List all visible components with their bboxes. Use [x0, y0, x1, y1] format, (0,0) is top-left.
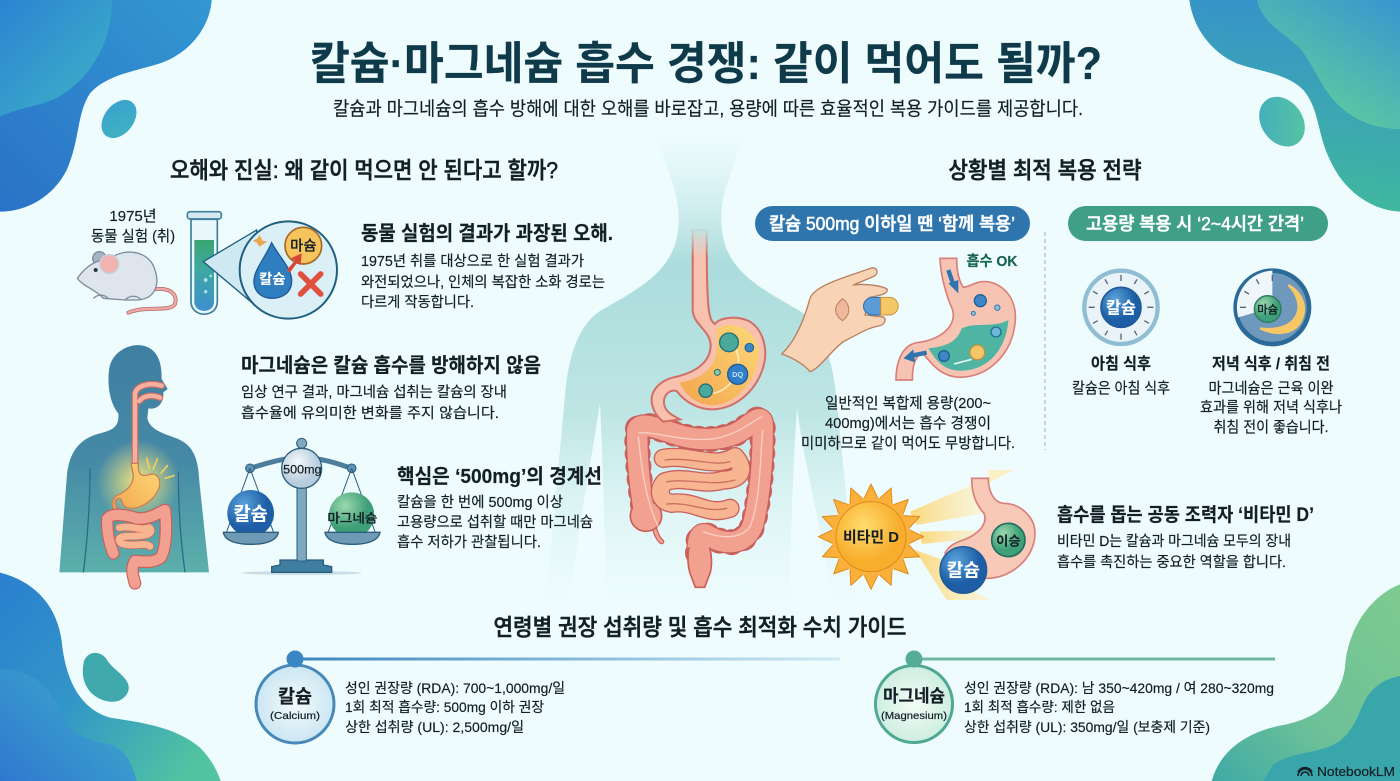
pill heading: together [755, 206, 1030, 241]
pill heading: spaced [1068, 206, 1328, 241]
icon: evening clock with moon [1236, 271, 1309, 344]
illustration: vitamin D sun and stomach [818, 470, 1035, 600]
text block: myth of animal study [361, 222, 613, 311]
guide: magnesium: 성인 권장량 (RDA): 남 350~420mg / 여 280~320mg [964, 680, 1274, 696]
text block: typical dose: 400mg)에서는 흡수 경쟁이 [825, 415, 991, 432]
label: absorption OK: 흡수 OK [966, 253, 1018, 270]
text block: morning: 아침 식후 [1091, 355, 1151, 373]
text block: typical dose [801, 395, 1015, 452]
guide: magnesium [876, 650, 1275, 742]
illustration: vitamin D sun and stomach: 칼슘 [947, 561, 980, 581]
guide: calcium: 성인 권장량 (RDA): 700~1,000mg/일 [345, 680, 565, 696]
text block: morning [1072, 355, 1170, 397]
text block: 500mg boundary: 흡수 저하가 관찰됩니다. [397, 534, 541, 551]
pill heading: together: 칼슘 500mg 이하일 땐 ‘함께 복용’ [769, 214, 1015, 234]
label: 1975 animal study: 1975년 [109, 208, 157, 225]
icon: evening clock with moon: 마슘 [1257, 304, 1278, 317]
corner blob: bottom right [1212, 584, 1400, 781]
label: 1975 animal study: 동물 실험 (취) [91, 228, 175, 245]
icon: balance scale with 500mg [223, 438, 380, 575]
central digestive illustration: DQ [732, 370, 743, 379]
text block: magnesium does not interfere: 마그네슘은 칼슘 흡수를 방해하지 않음 [241, 354, 541, 377]
icon: morning clock [1084, 271, 1158, 344]
test tube [187, 212, 221, 314]
icon: rat, test tube and lens [77, 212, 337, 319]
text block: typical dose: 일반적인 복합제 용량(200~ [825, 395, 991, 412]
guide: calcium: 상한 섭취량 (UL): 2,500mg/일 [345, 719, 524, 735]
lens: 칼슘 [259, 271, 286, 288]
guide: magnesium: 1회 최적 흡수량: 제한 없음 [964, 699, 1115, 715]
icon: human body with digestive tract [59, 345, 209, 583]
small intestine [660, 457, 741, 511]
guide: calcium: 칼슘 [278, 686, 312, 707]
text block: magnesium does not interfere [241, 354, 541, 422]
text block: myth of animal study: 동물 실험의 결과가 과장된 오해. [361, 222, 613, 245]
central body silhouette [545, 130, 858, 610]
text block: magnesium does not interfere: 흡수율에 유의미한 변화를 주지 않습니다. [241, 405, 499, 422]
corner blob: top left [0, 0, 212, 212]
text block: 500mg boundary [397, 465, 602, 551]
illustration: hand with capsule [782, 268, 898, 372]
text block: evening: 저녁 식후 / 취침 전 [1212, 355, 1330, 373]
guide: calcium: 1회 최적 흡수량: 500mg 이하 권장 [345, 699, 544, 715]
icon: balance scale with 500mg: 500mg [283, 463, 321, 476]
text block: myth of animal study: 다르게 작동합니다. [361, 294, 474, 311]
text block: typical dose: 미미하므로 같이 먹어도 무방합니다. [801, 435, 1015, 452]
guide: magnesium: 마그네슘 [883, 686, 945, 706]
text block: vitamin D [1057, 504, 1314, 571]
colon [630, 417, 763, 587]
section heading: left: 오해와 진실: 왜 같이 먹으면 안 된다고 할까? [170, 157, 558, 183]
lens: 마슘 [290, 238, 317, 255]
guide: calcium [256, 650, 840, 743]
subtitle: 칼슘과 마그네슘의 흡수 방해에 대한 오해를 바로잡고, 용량에 따른 효율적인 복용 가이드를 제공합니다. [333, 98, 1083, 120]
guide: magnesium: 상한 섭취량 (UL): 350mg/일 (보충제 기준) [964, 719, 1210, 735]
text block: evening [1200, 355, 1342, 436]
text block: evening: 마그네슘은 근육 이완 [1208, 380, 1334, 397]
text block: 500mg boundary: 핵심은 ‘500mg’의 경계선 [397, 465, 602, 488]
icon: morning clock: 칼슘 [1106, 299, 1136, 318]
text block: morning: 칼슘은 아침 식후 [1072, 380, 1170, 397]
corner blob: top right [1189, 0, 1400, 212]
illustration: vitamin D sun and stomach: 이승 [996, 533, 1021, 548]
section heading: bottom guide: 연령별 권장 섭취량 및 흡수 최적화 수치 가이드 [494, 614, 906, 640]
logo: NotebookLM: NotebookLM [1317, 764, 1395, 779]
guide: calcium: (Calcium) [270, 710, 320, 722]
text block: 500mg boundary: 고용량으로 섭취할 때만 마그네슘 [397, 514, 593, 531]
text block: myth of animal study: 와전되었으나, 인체의 복잡한 소화 경로는 [361, 274, 605, 291]
label: 1975 animal study [91, 208, 175, 245]
illustration: stomach absorption OK [896, 258, 1015, 380]
text block: vitamin D: 비타민 D는 칼슘과 마그네슘 모두의 장내 [1057, 533, 1291, 550]
title: 칼슘·마그네슘 흡수 경쟁: 같이 먹어도 될까? [310, 38, 1102, 89]
text block: evening: 효과를 위해 저녁 식후나 [1200, 399, 1342, 416]
text block: evening: 취침 전이 좋습니다. [1214, 419, 1328, 436]
icon: balance scale with 500mg: 마그네슘 [327, 511, 377, 525]
corner blob: bottom left [0, 573, 221, 781]
icon: balance scale with 500mg: 칼슘 [234, 503, 268, 524]
central digestive illustration [630, 229, 765, 587]
text block: vitamin D: 흡수를 촉진하는 중요한 역할을 합니다. [1057, 554, 1286, 571]
guide: magnesium: (Magnesium) [881, 710, 947, 722]
text block: magnesium does not interfere: 임상 연구 결과, 마그네슘 섭취는 칼슘의 장내 [241, 384, 507, 401]
illustration: vitamin D sun and stomach: 비타민 D [843, 529, 899, 546]
lens [203, 221, 337, 319]
pill heading: spaced: 고용량 복용 시 ‘2~4시간 간격’ [1086, 214, 1304, 234]
text block: myth of animal study: 1975년 취를 대상으로 한 실험 결과가 [361, 253, 584, 270]
text block: 500mg boundary: 칼슘을 한 번에 500mg 이상 [397, 494, 563, 511]
stomach [652, 230, 765, 422]
section heading: right: 상황별 최적 복용 전략 [948, 157, 1142, 183]
text block: vitamin D: 흡수를 돕는 공동 조력자 ‘비타민 D’ [1057, 504, 1314, 526]
